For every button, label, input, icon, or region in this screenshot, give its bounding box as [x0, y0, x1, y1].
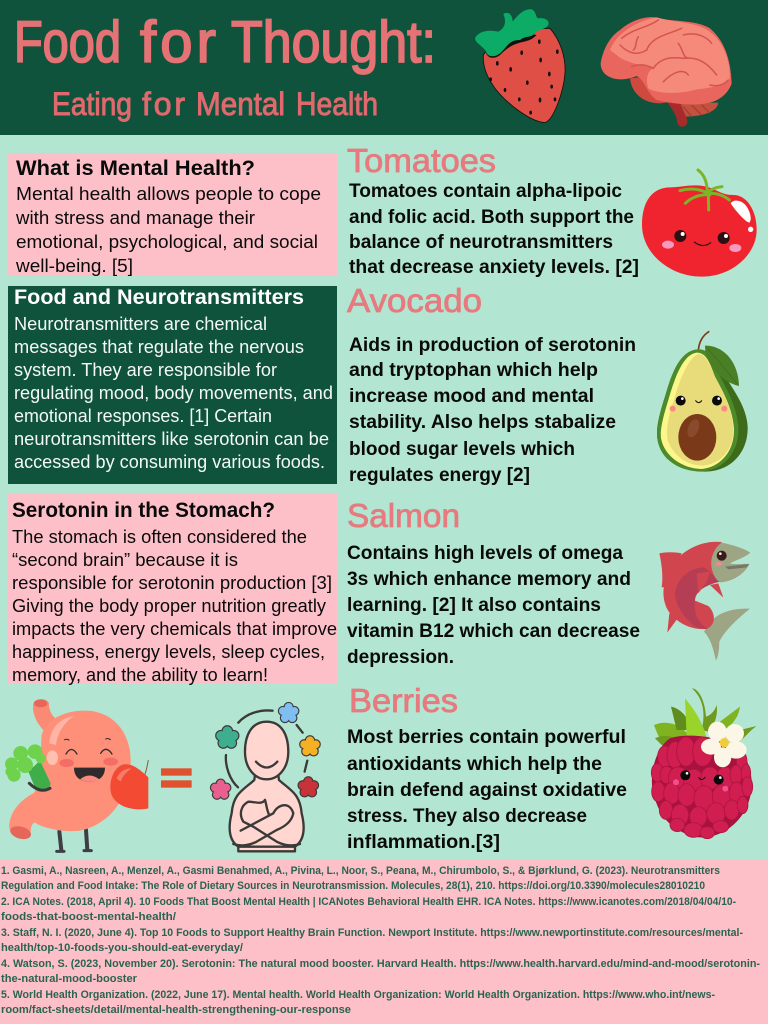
text block: Tomatoes contain alpha-lipoic	[349, 181, 622, 202]
subtitle: Health	[296, 86, 378, 122]
text block: Contains high levels of omega	[347, 543, 623, 564]
text block: Mental health allows people to cope	[16, 183, 321, 204]
text block: messages that regulate the nervous	[14, 336, 304, 357]
icon: salmon	[659, 542, 750, 661]
reference list: Regulation and Food Intake: The Role of Dietary Sources in Neurotransmission. Molecules, 28(1), 210. https://doi.org/10.3390/molecules28010210	[1, 880, 705, 892]
text block: Giving the body proper nutrition greatly	[12, 595, 327, 616]
icon: tomato	[642, 170, 757, 277]
text block: inflammation.[3]	[347, 832, 500, 853]
text block: neurotransmitters like serotonin can be	[14, 428, 329, 449]
text block: and folic acid. Both support the	[349, 207, 634, 228]
text block	[347, 543, 640, 668]
reference list: 4. Watson, S. (2023, November 20). Serotonin: The natural mood booster. Harvard Health. https://www.health.harvard.edu/mind-and-mood/serotonin-	[1, 958, 760, 970]
heading: Berries	[349, 682, 458, 719]
panel: references	[0, 860, 768, 1024]
heading: Food and Neurotransmitters	[14, 286, 304, 309]
reference list: health/top-10-foods-you-should-eat-everyday/	[1, 942, 243, 954]
text block: impacts the very chemicals that improve	[12, 618, 337, 639]
text block: brain defend against oxidative	[347, 780, 627, 801]
panel: avocado	[347, 282, 748, 486]
panel: berries	[347, 682, 757, 853]
heading: Tomatoes	[347, 142, 496, 179]
text block: “second brain” because it is	[12, 549, 238, 570]
subtitle: Eating	[52, 86, 132, 122]
title: Thought:	[231, 10, 436, 75]
text block	[347, 727, 627, 853]
title: Food	[14, 10, 121, 75]
text block: regulating mood, body movements, and	[14, 382, 333, 403]
text block: learning. [2] It also contains	[347, 595, 601, 616]
heading: What is Mental Health?	[16, 157, 255, 180]
icon: broccoli	[5, 744, 51, 792]
subtitle	[52, 86, 378, 122]
title: for	[140, 10, 216, 75]
reference list: 1. Gasmi, A., Nasreen, A., Menzel, A., Gasmi Benahmed, A., Pivina, L., Noor, S., Peana, M., Chirumbolo, S., & Bjørklund, G. (2023). Neurotransmitters	[1, 865, 720, 877]
text block: emotional, psychological, and social	[16, 231, 318, 252]
text block	[14, 313, 333, 472]
icon: calm person with flowers	[211, 703, 320, 851]
reference list: room/fact-sheets/detail/mental-health-strengthening-our-response	[1, 1004, 351, 1016]
icon: strawberry	[475, 9, 565, 123]
text block: Neurotransmitters are chemical	[14, 313, 267, 334]
reference list	[1, 865, 760, 1016]
heading: Serotonin in the Stomach?	[12, 499, 275, 522]
panel: food and neurotransmitters	[8, 286, 337, 484]
icon: apple	[110, 760, 148, 809]
illustration: stomach equals happiness	[5, 699, 320, 851]
header band	[0, 0, 768, 135]
text block: stress. They also decrease	[347, 806, 587, 827]
text block	[12, 526, 337, 685]
text block: emotional responses. [1] Certain	[14, 405, 272, 426]
text block: happiness, energy levels, sleep cycles,	[12, 641, 325, 662]
text block: Aids in production of serotonin	[349, 335, 636, 356]
text block: blood sugar levels which	[349, 439, 575, 460]
heading: Avocado	[347, 282, 482, 319]
text block: balance of neurotransmitters	[349, 232, 613, 253]
text block: system. They are responsible for	[14, 359, 277, 380]
text block: stability. Also helps stabalize	[349, 412, 616, 433]
subtitle: for	[142, 86, 185, 122]
text block: antioxidants which help the	[347, 754, 602, 775]
text block: well-being. [5]	[15, 255, 133, 276]
icon: stomach character	[5, 699, 148, 851]
text block	[349, 335, 636, 486]
reference list: 5. World Health Organization. (2022, June 17). Mental health. World Health Organization: World Health Organization. https://www.who.int/news-	[1, 989, 715, 1001]
text block	[349, 181, 639, 278]
text block: and tryptophan which help	[349, 360, 598, 381]
icon: avocado	[657, 331, 748, 472]
panel: serotonin in the stomach	[8, 493, 337, 685]
panel: tomatoes	[347, 142, 757, 278]
heading: Salmon	[347, 497, 460, 534]
reference list: 2. ICA Notes. (2018, April 4). 10 Foods That Boost Mental Health | ICANotes Behavioral Health EHR. ICA Notes. https://www.icanotes.com/2018/04/04/10-	[1, 896, 736, 908]
panel: salmon	[347, 497, 750, 668]
title	[14, 10, 436, 75]
text block: depression.	[347, 647, 454, 668]
text block	[15, 183, 321, 276]
text block: increase mood and mental	[349, 386, 594, 407]
reference list: foods-that-boost-mental-health/	[1, 911, 176, 923]
subtitle: Mental	[196, 86, 285, 122]
text block: responsible for serotonin production [3]	[12, 572, 332, 593]
icon: raspberry	[651, 688, 757, 839]
text block: that decrease anxiety levels. [2]	[349, 257, 639, 278]
text block: with stress and manage their	[15, 207, 255, 228]
panel: what is mental health	[8, 153, 337, 276]
text block: vitamin B12 which can decrease	[347, 621, 640, 642]
text block: Most berries contain powerful	[347, 727, 626, 748]
text block: The stomach is often considered the	[12, 526, 307, 547]
text block: accessed by consuming various foods.	[14, 451, 325, 472]
text block: memory, and the ability to learn!	[12, 664, 268, 685]
text block: 3s which enhance memory and	[347, 569, 631, 590]
reference list: the-natural-mood-booster	[1, 973, 138, 985]
text block: regulates energy [2]	[349, 465, 530, 486]
icon: brain	[601, 17, 732, 127]
equals sign	[161, 768, 192, 788]
reference list: 3. Staff, N. I. (2020, June 4). Top 10 Foods to Support Healthy Brain Function. Newport Institute. https://www.newportinstitute.com/resources/mental-	[1, 927, 743, 939]
